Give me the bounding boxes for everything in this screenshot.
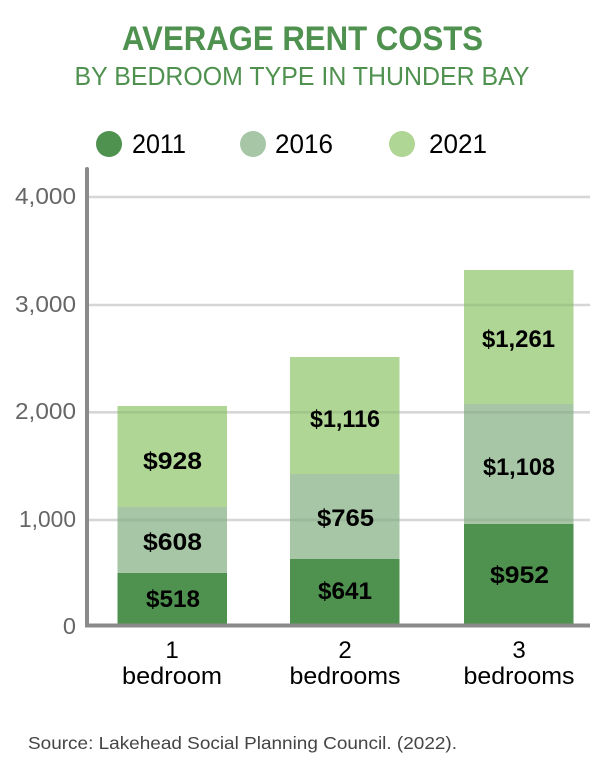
source note: Source: Lakehead Social Planning Council. (2022).: [28, 733, 457, 753]
y axis labels: 3,000: [15, 291, 76, 317]
bar: 1 bedroom: $928: [143, 448, 202, 475]
x axis labels: 1: [165, 637, 179, 664]
bar: 1 bedroom: $608: [143, 529, 202, 556]
bar: 3 bedrooms: [464, 270, 574, 626]
y axis labels: 2,000: [15, 398, 76, 424]
title: AVERAGE RENT COSTS: [122, 20, 483, 58]
x axis labels: 2: [338, 637, 352, 664]
y axis labels: 0: [63, 613, 76, 639]
bar: 3 bedrooms: $1,261: [482, 326, 555, 353]
y axis labels: 1,000: [19, 506, 76, 532]
gridlines: [88, 197, 590, 520]
legend: 2016: [275, 129, 333, 159]
y axis labels: [15, 183, 76, 639]
x axis labels: bedrooms: [464, 663, 574, 690]
bar: 2 bedrooms: $765: [317, 505, 374, 532]
bar: 1 bedroom: [118, 406, 227, 626]
y axis labels: 4,000: [15, 183, 76, 209]
axes: [85, 169, 590, 626]
subtitle: BY BEDROOM TYPE IN THUNDER BAY: [74, 61, 530, 91]
x axis labels: [122, 637, 574, 690]
bar: 2 bedrooms: $641: [318, 578, 372, 605]
legend: 2011: [132, 129, 186, 159]
bar: 2 bedrooms: [290, 357, 400, 626]
bar: 3 bedrooms: $952: [490, 562, 549, 589]
bar: 2 bedrooms: $1,116: [310, 406, 380, 433]
legend: [96, 129, 487, 159]
bar: 3 bedrooms: $1,108: [483, 454, 555, 481]
x axis labels: 3: [512, 637, 526, 664]
stacked bar chart: [15, 169, 590, 690]
bar: 1 bedroom: $518: [146, 586, 200, 613]
legend: 2021: [429, 129, 487, 159]
x axis labels: bedrooms: [290, 663, 400, 690]
x axis labels: bedroom: [122, 663, 222, 690]
